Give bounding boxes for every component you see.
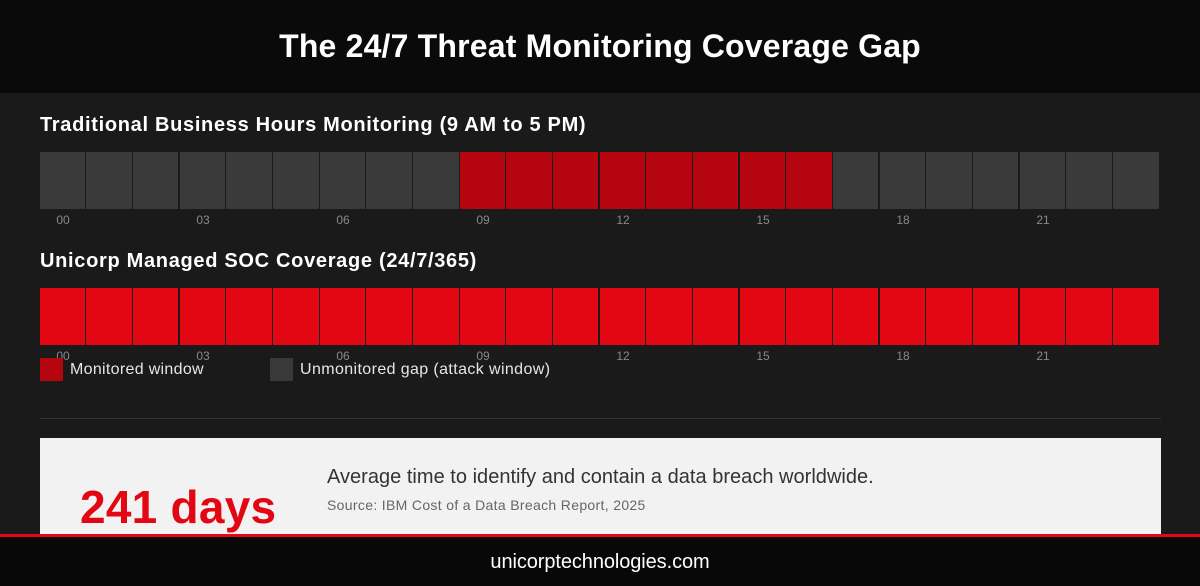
hour labels: managed SOC: 09	[476, 349, 490, 363]
statistic description: Average time to identify and contain a data breach worldwide.	[327, 466, 874, 488]
hour labels: traditional: 21	[1036, 213, 1050, 227]
big number: 241 days	[80, 481, 276, 533]
legend label: monitored: Monitored window	[70, 361, 204, 378]
hour labels: traditional: 09	[476, 213, 490, 227]
hour labels: managed SOC: 12	[616, 349, 630, 363]
panel: breach statistic	[40, 438, 1161, 534]
hour labels: traditional: 18	[896, 213, 910, 227]
header band	[0, 0, 1200, 93]
hour labels: managed SOC: 21	[1036, 349, 1050, 363]
hour labels: traditional: 06	[336, 213, 350, 227]
hour labels: traditional	[56, 213, 1050, 227]
legend	[40, 358, 550, 381]
hour labels: traditional: 00	[56, 213, 70, 227]
hour labels: traditional: 03	[196, 213, 210, 227]
hour labels: managed SOC: 03	[196, 349, 210, 363]
hour labels: managed SOC: 18	[896, 349, 910, 363]
legend swatch: unmonitored	[270, 358, 293, 381]
hour labels: traditional: 12	[616, 213, 630, 227]
hour labels: managed SOC	[56, 349, 1050, 363]
legend swatch: monitored	[40, 358, 63, 381]
hour labels: managed SOC: 15	[756, 349, 770, 363]
statistic source: Source: IBM Cost of a Data Breach Report, 2025	[327, 497, 646, 513]
heading: traditional monitoring: Traditional Business Hours Monitoring (9 AM to 5 PM)	[40, 114, 586, 136]
hour labels: traditional: 15	[756, 213, 770, 227]
legend label: unmonitored: Unmonitored gap (attack window)	[300, 361, 550, 378]
timeline: managed SOC coverage	[40, 288, 1159, 345]
hour labels: managed SOC: 00	[56, 349, 70, 363]
footer	[0, 534, 1200, 586]
timeline: traditional business hours	[40, 152, 1159, 209]
title: The 24/7 Threat Monitoring Coverage Gap	[279, 28, 921, 64]
hour labels: managed SOC: 06	[336, 349, 350, 363]
footer URL: unicorptechnologies.com	[490, 551, 710, 573]
heading: managed SOC: Unicorp Managed SOC Coverage (24/7/365)	[40, 250, 477, 272]
